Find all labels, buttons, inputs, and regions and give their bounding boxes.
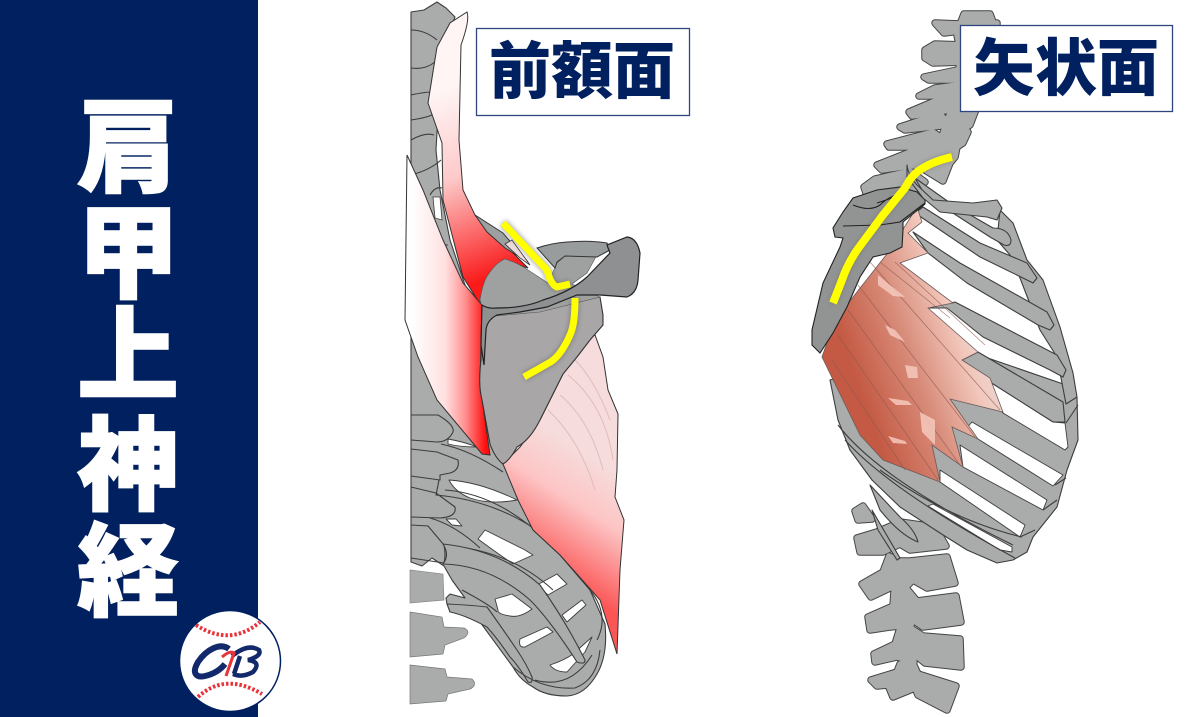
clavicle lateral [907,165,1002,220]
ribs [913,178,1066,422]
lower rib contour lines [838,405,1078,558]
muscle fibre lines and tendinous patches [832,262,1000,480]
title: vertical heading: 上 [77,300,179,414]
cartilage outer edge [997,210,1077,404]
title: vertical heading: 経 [77,516,179,630]
scapular spine edge [843,193,925,226]
scapula lateral [812,187,925,353]
serratus faint rib pattern [548,360,613,490]
muscle: serratus anterior, lateral view [822,207,1003,482]
label: coronal plane [476,28,690,116]
sidebar background [0,0,258,717]
left figure: anterior shoulder skeleton and muscles [405,2,640,704]
label: coronal plane: 前額面 [489,38,675,107]
lower-left small rib tips [870,485,918,560]
scapula body [480,290,603,464]
vertebrae, lower thoracic [410,570,444,603]
spine and rib cage, front view [410,2,606,704]
logo: baseball badge [180,610,280,712]
scapular spine and acromion [481,237,640,365]
title: vertical heading [77,92,179,630]
title: vertical heading: 甲 [77,198,179,312]
title: vertical heading: 肩 [77,92,179,206]
right figure: sagittal rib cage view [812,14,1078,710]
spine vertebrae [855,14,997,710]
muscle: serratus anterior [503,335,624,654]
muscle: rhomboid (white to red) [405,155,490,455]
title: vertical heading: 神 [77,410,179,524]
clavicle fragment [475,215,528,262]
humeral head [480,255,600,316]
muscle: levator scapulae (pink to red) [428,12,528,304]
coracoid [537,241,610,268]
rib gaps [928,382,1068,552]
nerve: left figure [503,223,575,377]
nerve: right figure [833,157,952,303]
lower rib mass [830,345,1078,563]
label: sagittal plane: 矢状面 [973,35,1159,104]
